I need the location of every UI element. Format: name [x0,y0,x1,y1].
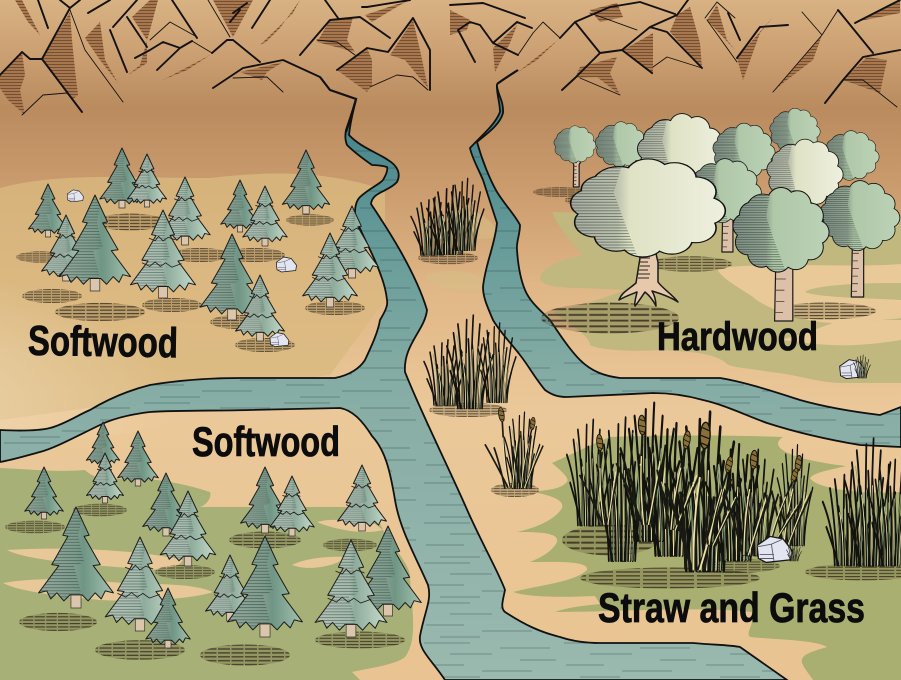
pine tree [219,180,259,232]
pine tree [280,150,330,214]
pine tree [204,555,254,621]
oak tree rear [712,122,775,178]
shadows [562,525,780,588]
pine tree [36,507,113,608]
shadows [16,214,365,352]
pine tree [239,467,289,533]
oak tree mid [688,158,761,252]
oak tree front right [732,186,829,321]
pine tree [312,540,387,637]
pine tree [198,234,264,320]
pine tree [57,195,131,291]
sand patches: softwood south [3,520,383,601]
straw and wheat field [562,404,816,588]
oak tree cream right [766,138,843,206]
pine tree [85,422,120,467]
pine tree [40,215,90,281]
pine tree [158,491,216,566]
pine tree [126,154,167,207]
green ground: straw and grass [513,436,901,680]
pine tree [141,473,189,536]
mountain range [0,0,900,115]
pine tree [128,210,196,298]
label: hardwood: Hardwood [657,315,818,359]
rock [276,257,296,272]
label: softwood south: Softwood [192,418,340,465]
pine tree [85,453,124,503]
pine tree [98,148,144,208]
pine tree [102,537,175,631]
green ground: hardwood [540,212,901,383]
hardwood forest [533,108,899,333]
sand patches: hardwood [717,264,901,345]
shadows [533,187,876,333]
pine tree [27,184,68,237]
pine tree [234,275,284,341]
pine tree [323,206,379,278]
mountain ridge lines [0,0,900,115]
river: east branch [470,70,901,447]
oak tree cream rear left [636,112,726,195]
pine tree [158,177,210,245]
rock [270,333,289,347]
oak tree small [595,121,647,182]
pine tree [268,476,314,536]
land tint: softwood north [0,174,385,420]
pine tree [23,467,63,519]
oak tree rear right [769,108,820,152]
green ground: softwood south [0,468,413,680]
pine tree [336,465,386,531]
softwood forest north [16,148,379,352]
pine tree [225,536,302,637]
reeds: island middle [424,316,516,417]
pine tree [352,526,421,616]
land glow: softwood north lower left [0,260,270,440]
rock [757,536,792,562]
label: softwood north: Softwood [28,317,178,366]
rock [67,190,83,202]
oak tree small [553,125,596,187]
softwood forest south [5,422,421,666]
wheat and grass: island lower [480,405,547,497]
oak tree right [819,180,899,297]
central island tint [425,211,500,292]
pine tree [116,431,158,486]
reeds: east edge [805,439,901,580]
river: main and west branch [0,77,787,680]
oak tree right rear [822,130,879,180]
rock with grass: hardwood shore [840,355,870,379]
pine tree [144,588,190,648]
shadows [5,504,405,666]
pine tree [300,233,357,307]
mountain shading [0,0,900,115]
pine tree [241,186,287,246]
reeds: island top [411,179,484,264]
oak tree large foreground [569,158,725,306]
